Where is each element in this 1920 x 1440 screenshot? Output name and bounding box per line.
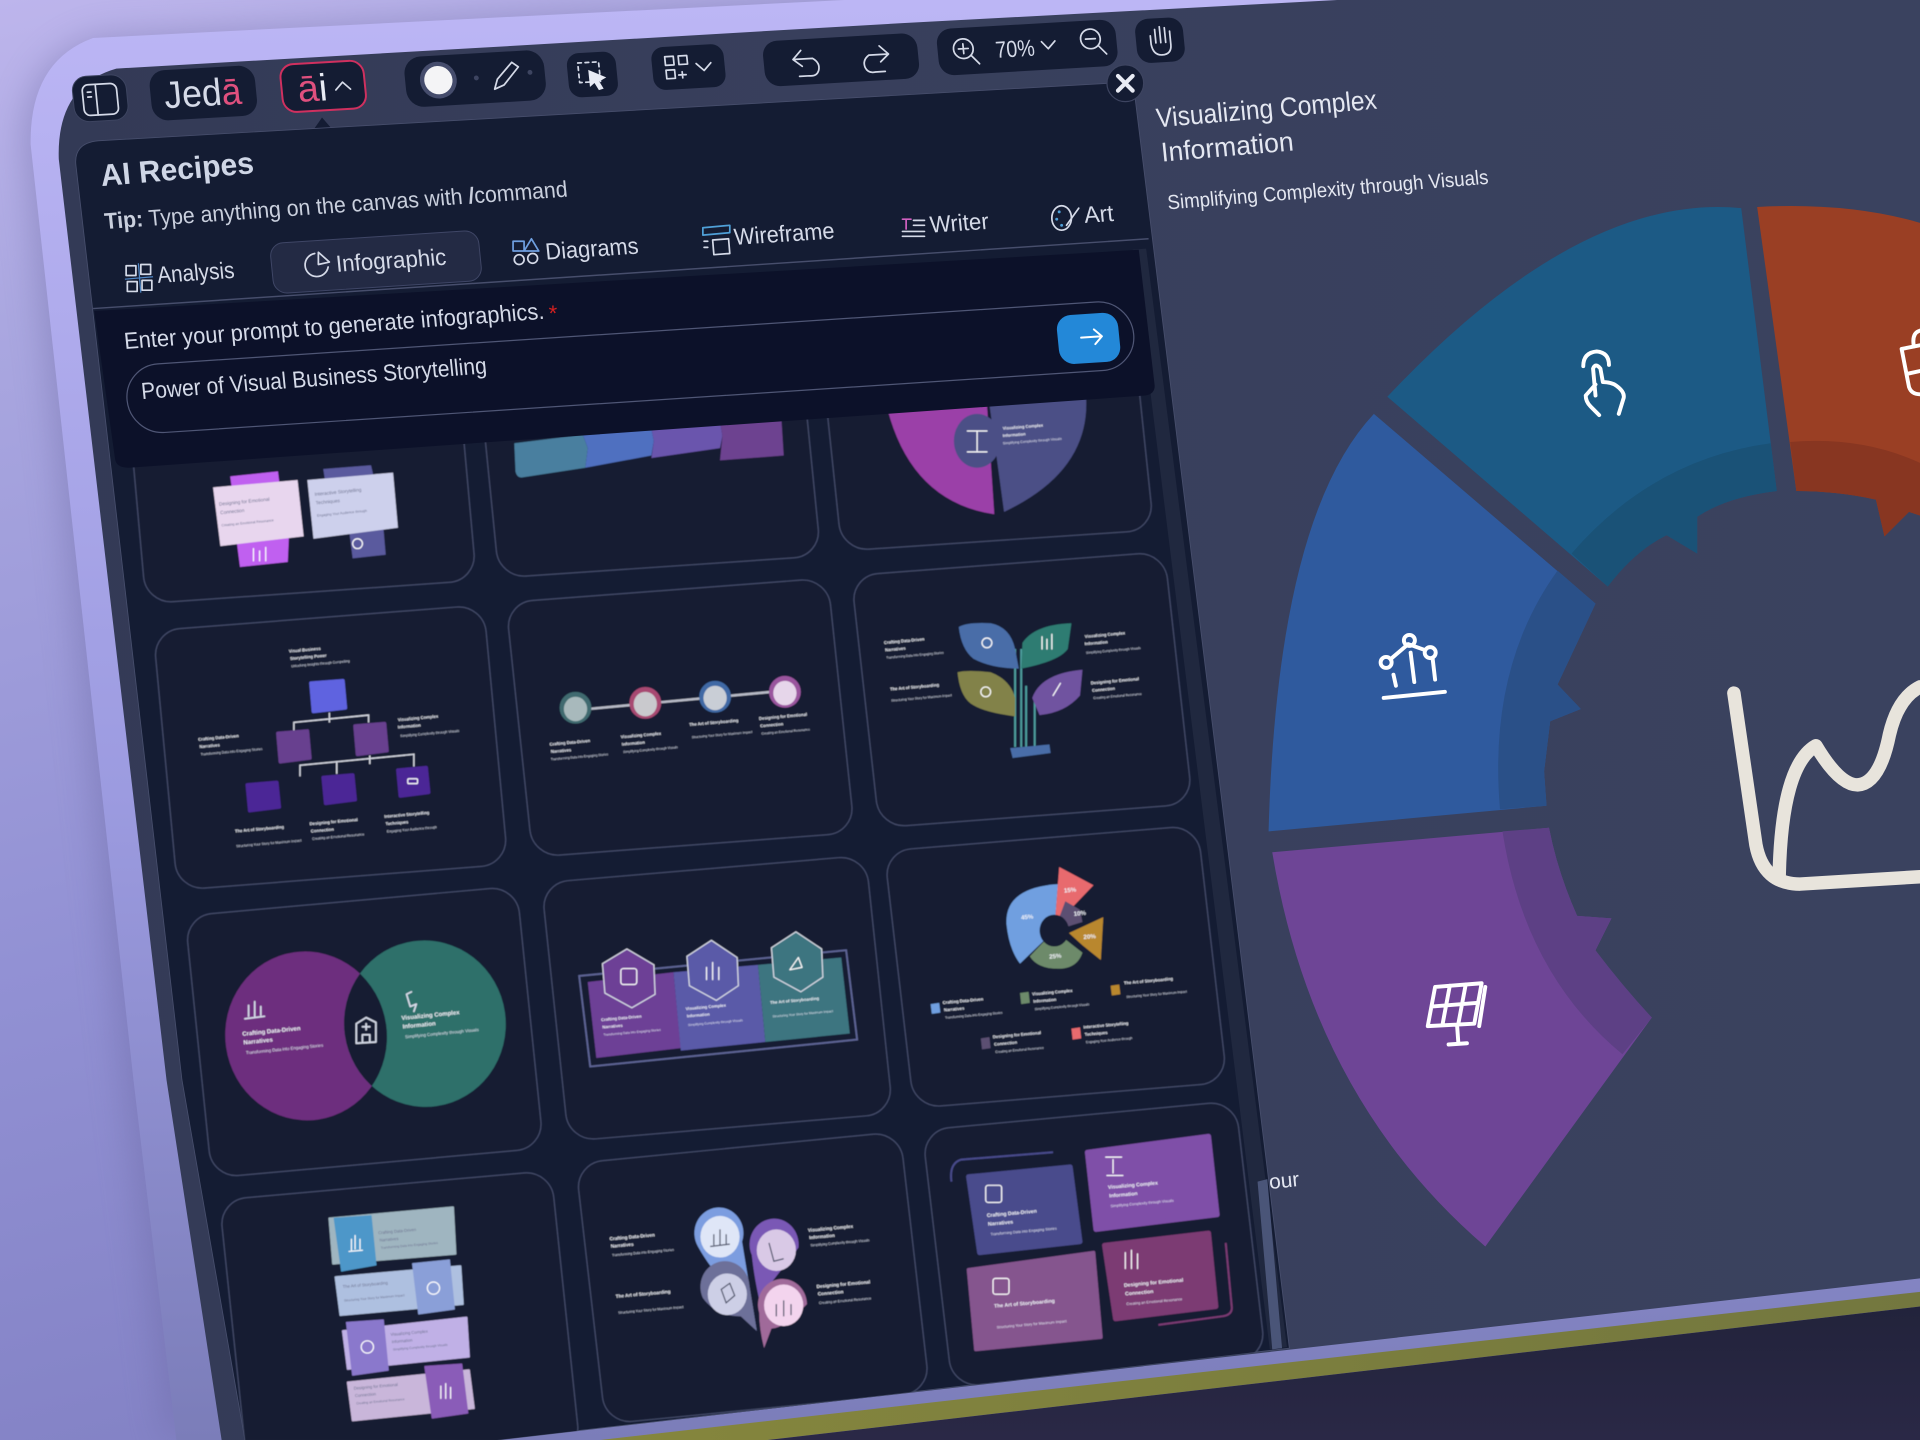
card: timeline: Creating an Emotional Resonance: [761, 727, 810, 736]
card: donut chart: 25%: [1049, 953, 1062, 961]
card: venn diagram: Simplifying Complexity through Visuals: [405, 1027, 479, 1039]
canvas: title text: [1155, 85, 1489, 214]
card: venn diagram: Information: [402, 1021, 436, 1031]
segment: teal: [1387, 207, 1777, 587]
card: plant leaves: Simplifying Complexity through Visuals: [1086, 646, 1141, 655]
olive base strip: [600, 1292, 1920, 1440]
card: row 1 centre: [484, 420, 820, 578]
card: donut chart: 15%: [1064, 887, 1077, 895]
button: close: [1107, 65, 1144, 102]
card: four boxes: Information: [1109, 1191, 1138, 1200]
card: teardrops: Creating an Emotional Resonance: [819, 1296, 871, 1305]
card: hexagon panels: Information: [687, 1011, 710, 1019]
card: donut chart: Visualizing Complex: [1032, 988, 1073, 997]
card: timeline: Information: [622, 740, 645, 747]
card: org chart: Narratives: [199, 742, 221, 749]
card: teardrops: Crafting Data-Driven: [609, 1232, 655, 1241]
card: org chart: Interactive Storytelling: [384, 810, 430, 819]
tab: wireframe: [703, 217, 836, 255]
button: submit arrow: [1056, 312, 1122, 365]
card: teardrops: Simplifying Complexity through Visuals: [810, 1238, 870, 1248]
card: org chart: [153, 605, 508, 890]
prompt overlay panel: [94, 250, 1155, 468]
card: stacked tabs: Designing for Emotional: [353, 1382, 398, 1391]
card: donut chart: Information: [1033, 997, 1057, 1004]
card: teardrops: Designing for Emotional: [816, 1279, 870, 1289]
button: sidebar toggle: [71, 74, 129, 122]
card: teardrops: Structuring Your Story for Maximum Impact: [618, 1305, 684, 1315]
card: hexagon panels: Visualizing Complex: [685, 1003, 727, 1011]
card: row 1 right: Visualizing Complex: [1002, 423, 1044, 431]
card: org chart: Unlocking Insights through Compelling: [291, 659, 350, 668]
card: org chart: Visual Business: [289, 646, 322, 654]
prompt label: Enter your prompt to generate infographics.: [123, 298, 545, 354]
card: teardrops: Narratives: [611, 1242, 634, 1249]
icon: big line chart: [1734, 687, 1920, 884]
icon: solar panel: [1428, 983, 1485, 1044]
tab: infographic: Infographic: [335, 244, 448, 277]
card: row 1 left: Creating an Emotional Resonance: [221, 518, 274, 528]
tool: selection: [566, 51, 619, 98]
card: row 1 right: [826, 396, 1152, 550]
card: timeline: Structuring Your Story for Maximum Impact: [692, 730, 753, 739]
card: row 1 right: Simplifying Complexity through Visuals: [1003, 437, 1062, 445]
tab: art: Art: [1083, 200, 1115, 228]
icon: basket: [1902, 331, 1920, 394]
heading: AI Recipes: AI Recipes: [99, 145, 255, 193]
card: stacked tabs: Simplifying Complexity through Visuals: [393, 1343, 448, 1352]
card: four boxes: [922, 1101, 1266, 1387]
card: timeline: Transforming Data into Engaging Stories: [551, 752, 609, 761]
card: plant leaves: Transforming Data into Engaging Stories: [886, 651, 944, 660]
card: four boxes: The Art of Storyboarding: [994, 1298, 1055, 1310]
card: plant leaves: Creating an Emotional Resonance: [1093, 692, 1142, 700]
card: four boxes: Narratives: [988, 1219, 1014, 1228]
card: plant leaves: Designing for Emotional: [1091, 676, 1139, 685]
canvas: title text: Visualizing Complex: [1155, 85, 1379, 133]
card: hexagon panels: The Art of Storyboarding: [770, 996, 820, 1005]
card: timeline: Connection: [760, 721, 784, 728]
card: row 1 left: Connection: [220, 508, 245, 516]
canvas: title text: Information: [1160, 126, 1295, 168]
prompt input: Power of Visual Business Storytelling: [140, 352, 488, 404]
prompt label: *: [549, 301, 558, 326]
card: donut chart: Narratives: [944, 1006, 965, 1012]
card: plant leaves: Information: [1084, 639, 1108, 646]
card: hexagon panels: Crafting Data-Driven: [601, 1014, 642, 1022]
card: donut chart: Transforming Data into Engaging Stories: [945, 1011, 1003, 1020]
card: org chart: Crafting Data-Driven: [198, 733, 239, 742]
tool: colour and pen: [403, 49, 547, 108]
button: ai menu: āi: [296, 67, 329, 111]
tool: grid menu: [650, 44, 727, 91]
card: teardrops: Transforming Data into Engaging Stories: [612, 1248, 674, 1257]
canvas: wheel chart: [1269, 206, 1920, 1247]
card: org chart: Visualizing Complex: [398, 714, 439, 722]
card: donut chart: Techniques: [1084, 1030, 1108, 1037]
card: plant leaves: Visualizing Complex: [1084, 630, 1126, 639]
card: org chart: The Art of Storyboarding: [235, 824, 285, 834]
card: hexagon panels: Structuring Your Story for Maximum Impact: [772, 1009, 833, 1019]
card: row 1 left: Techniques: [316, 498, 341, 506]
logo: Jeda: Jedā: [162, 71, 244, 117]
card: hexagon panels: Narratives: [602, 1023, 624, 1030]
icon: hand tap: [1583, 351, 1624, 415]
card: stacked tabs: Creating an Emotional Resonance: [356, 1397, 405, 1405]
scrollbar: [1133, 249, 1287, 1349]
panel: AI Recipes: [76, 83, 1289, 1440]
card: stacked tabs: Narratives: [379, 1236, 399, 1243]
card: four boxes: Crafting Data-Driven: [987, 1209, 1037, 1219]
card: plant leaves: Narratives: [885, 646, 906, 652]
tab: writer: Writer: [929, 208, 990, 238]
card: donut chart: The Art of Storyboarding: [1124, 976, 1174, 985]
card: donut chart: Interactive Storytelling: [1083, 1021, 1129, 1030]
card: hexagon panels: [541, 855, 893, 1141]
card: four boxes: Connection: [1125, 1289, 1154, 1298]
card: donut chart: Simplifying Complexity through Visuals: [1034, 1002, 1090, 1011]
segment: purple: [1272, 828, 1652, 1247]
card: donut chart: Connection: [994, 1040, 1018, 1047]
card: row 1 right: Information: [1002, 431, 1026, 438]
canvas: title text: Simplifying Complexity through Visuals: [1166, 167, 1489, 214]
tool: zoom controls: 70%: [994, 35, 1036, 63]
segment: blue: [1269, 414, 1596, 831]
tab: diagrams: Diagrams: [544, 233, 640, 265]
card: donut chart: Designing for Emotional: [993, 1030, 1041, 1039]
card: stacked tabs: Visualizing Complex: [390, 1328, 429, 1337]
card: plant leaves: [851, 552, 1193, 828]
tip text: Tip: Type anything on the canvas with /command: [103, 176, 569, 234]
card: stacked tabs: Structuring Your Story for Maximum Impact: [344, 1293, 405, 1303]
card: venn diagram: Visualizing Complex: [401, 1010, 461, 1022]
card: donut chart: Structuring Your Story for Maximum Impact: [1126, 990, 1187, 999]
card: org chart: Creating an Emotional Resonance: [312, 832, 365, 841]
card: plant leaves: Structuring Your Story for Maximum Impact: [891, 693, 952, 703]
card: four boxes: Designing for Emotional: [1124, 1278, 1184, 1289]
tab: writer: [902, 208, 990, 238]
card grid: [122, 304, 1266, 1440]
card: hexagon panels: Simplifying Complexity through Visuals: [688, 1018, 743, 1027]
card: org chart: Information: [398, 722, 421, 730]
card: hexagon panels: Transforming Data into Engaging Stories: [603, 1028, 661, 1037]
canvas: clipped caption: our: [1268, 1168, 1300, 1194]
card: org chart: Designing for Emotional: [309, 817, 358, 826]
card: donut chart: Engaging Your Audience through: [1086, 1036, 1133, 1044]
card: four boxes: Transforming Data into Engaging Stories: [990, 1227, 1057, 1237]
panel background: [76, 83, 1289, 1440]
card: four boxes: Visualizing Complex: [1108, 1181, 1158, 1191]
card: org chart: Transforming Data into Engaging Stories: [201, 747, 263, 757]
card: timeline: Crafting Data-Driven: [549, 738, 591, 747]
card: stacked tabs: Connection: [355, 1391, 377, 1398]
card: donut chart: 20%: [1083, 933, 1097, 941]
card: plant leaves: The Art of Storyboarding: [890, 682, 940, 692]
org connectors: [294, 713, 414, 776]
icon: bar nodes: [1384, 644, 1445, 698]
tab: wireframe: Wireframe: [733, 217, 836, 250]
card: donut chart: [884, 825, 1227, 1108]
card: timeline: [506, 578, 855, 857]
tab: active infographic: [269, 230, 483, 294]
logo: Jeda: [148, 65, 258, 121]
tab: art: [1052, 200, 1115, 230]
card: donut chart: Creating an Emotional Resonance: [995, 1046, 1044, 1054]
card: four boxes: Structuring Your Story for Maximum Impact: [996, 1319, 1067, 1330]
tool: undo and redo: [762, 33, 920, 87]
card: venn diagram: [185, 886, 544, 1178]
card: plant leaves: Connection: [1092, 686, 1116, 693]
card: timeline: The Art of Storyboarding: [689, 718, 739, 727]
frame shadow: [24, 0, 845, 1440]
card: stacked tabs: The Art of Storyboarding: [342, 1280, 389, 1289]
tab bar: [93, 200, 1149, 309]
card: venn diagram: Transforming Data into Engaging Stories: [246, 1043, 323, 1055]
card: teardrops: The Art of Storyboarding: [616, 1289, 671, 1299]
button: ai menu: [279, 60, 367, 113]
card: org chart: Connection: [311, 827, 334, 834]
card: org chart: Techniques: [385, 819, 409, 826]
card: stacked tabs: Information: [391, 1337, 413, 1344]
card: stacked tabs: Transforming Data into Engaging Stories: [381, 1241, 439, 1250]
card: teardrops: [576, 1131, 930, 1424]
card: row 1 left: Designing for Emotional: [219, 497, 270, 508]
card: org chart: Simplifying Complexity through Visuals: [400, 729, 460, 738]
card: stacked tabs: [219, 1170, 581, 1440]
card: venn diagram: Narratives: [243, 1038, 274, 1046]
tab: analysis: Analysis: [156, 257, 236, 288]
card: timeline: Designing for Emotional: [759, 712, 807, 721]
card: row 1 left: Interactive Storytelling: [314, 487, 362, 498]
card: timeline: Narratives: [551, 747, 572, 754]
prompt input: [124, 300, 1137, 435]
menu pointer: [313, 118, 331, 130]
card: org chart: Structuring Your Story for Maximum Impact: [236, 838, 302, 848]
card: row 1 left: [132, 444, 476, 603]
segment: orange: [1757, 206, 1920, 536]
card: row 1 left: Engaging Your Audience through: [317, 509, 367, 518]
card: stacked tabs: Crafting Data-Driven: [378, 1227, 417, 1235]
card: timeline: Visualizing Complex: [620, 731, 662, 739]
card: teardrops: Information: [809, 1233, 835, 1240]
tool: zoom controls: [936, 19, 1119, 76]
card: donut chart: 45%: [1021, 913, 1034, 922]
card: four boxes: Simplifying Complexity through Visuals: [1110, 1199, 1174, 1208]
card: teardrops: Visualizing Complex: [808, 1224, 854, 1233]
card: plant leaves: Crafting Data-Driven: [884, 636, 925, 645]
tab: analysis: [125, 257, 236, 293]
card: donut chart: Crafting Data-Driven: [942, 996, 984, 1005]
toolbar: [71, 17, 1186, 122]
card: org chart: Engaging Your Audience through: [387, 825, 437, 834]
card: four boxes: Creating an Emotional Resonance: [1126, 1297, 1183, 1306]
card: timeline: Simplifying Complexity through Visuals: [623, 745, 678, 754]
card: org chart: Storytelling Power: [290, 653, 327, 661]
card: venn diagram: Crafting Data-Driven: [242, 1026, 301, 1038]
card: teardrops: Connection: [818, 1289, 844, 1297]
dark floor: [768, 1307, 1920, 1440]
card: donut chart: 10%: [1073, 910, 1087, 918]
tool: hand: [1134, 17, 1186, 64]
